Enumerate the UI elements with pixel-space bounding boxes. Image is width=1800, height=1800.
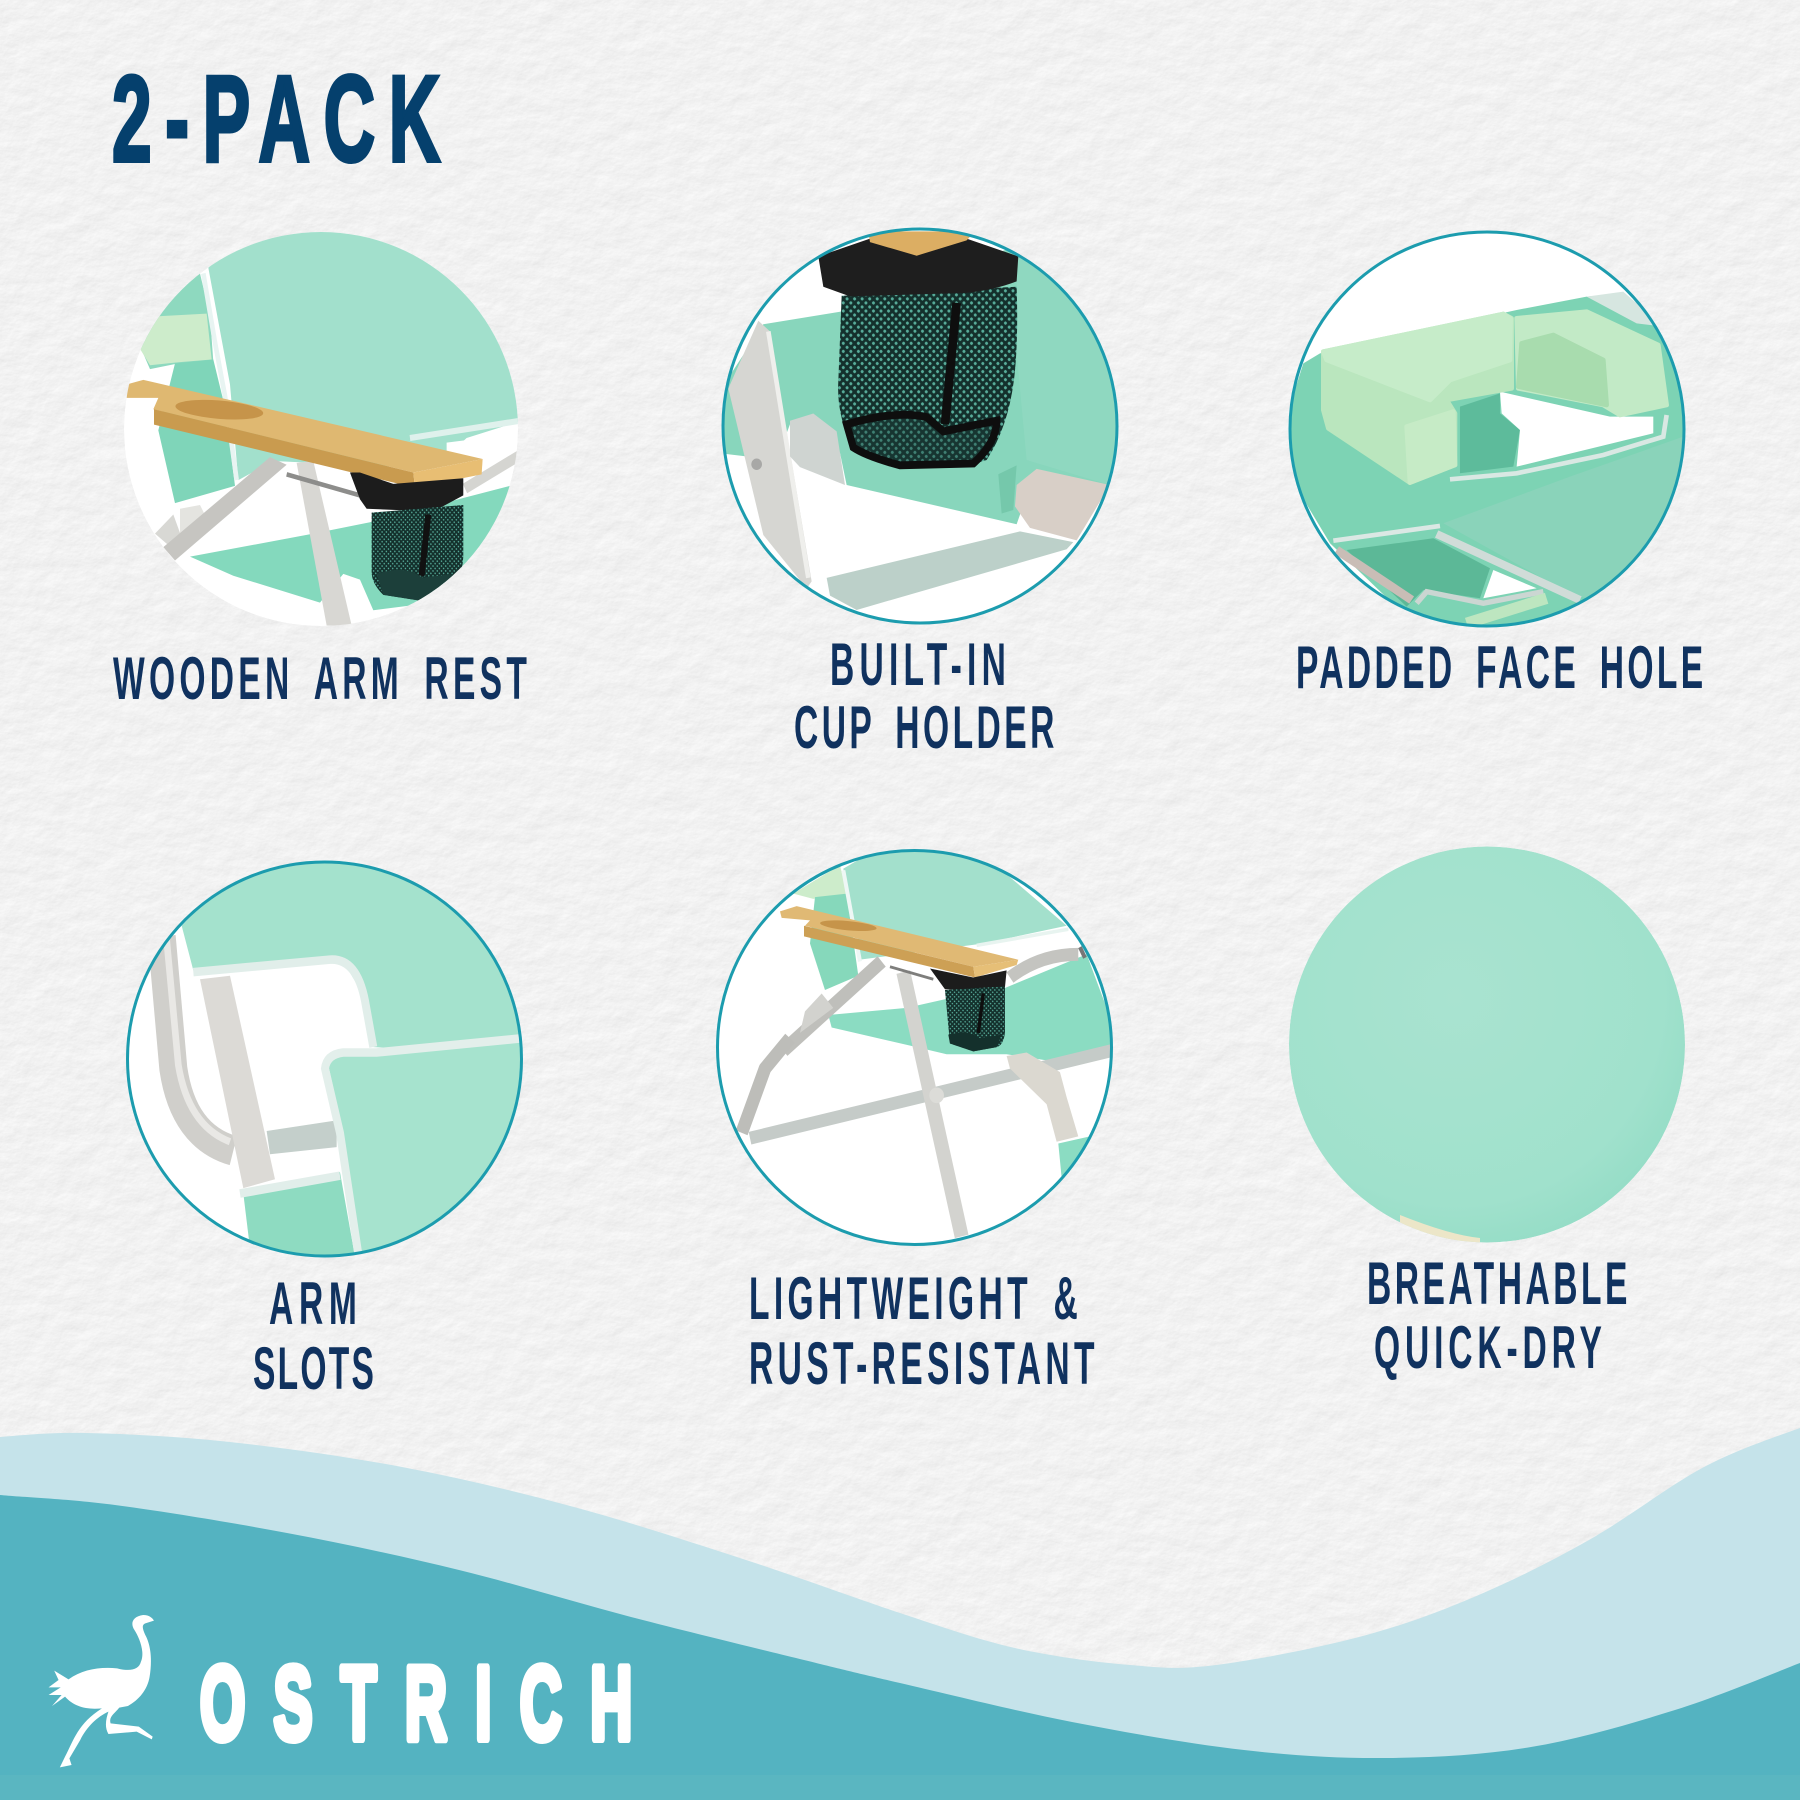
label: arm slots: ARM bbox=[269, 1271, 357, 1338]
ring: padded face hole bbox=[1290, 232, 1684, 626]
label: built-in cup holder bbox=[794, 632, 1054, 762]
icon: running ostrich bbox=[49, 1615, 154, 1767]
photo: padded face hole circle bbox=[1283, 232, 1690, 630]
label: lightweight and rust-resistant bbox=[749, 1266, 1095, 1398]
panel: wooden arm rest bbox=[113, 232, 527, 700]
ring: arm slots bbox=[128, 862, 522, 1256]
label: breathable quick-dry: BREATHABLE bbox=[1367, 1251, 1627, 1318]
label: arm slots bbox=[253, 1271, 374, 1403]
panel: arm slots bbox=[128, 847, 543, 1403]
label: lightweight and rust-resistant: LIGHTWEIGHT & bbox=[749, 1266, 1078, 1333]
logo: Ostrich bbox=[49, 1615, 632, 1767]
photo: arm rest circle bbox=[124, 232, 518, 626]
label: breathable quick-dry: QUICK-DRY bbox=[1374, 1315, 1602, 1382]
label: built-in cup holder: CUP HOLDER bbox=[794, 695, 1054, 762]
photo: fabric swatch circle bbox=[1289, 846, 1685, 1250]
label: padded face hole: PADDED FACE HOLE bbox=[1296, 635, 1703, 702]
panel: built-in cup holder bbox=[717, 229, 1133, 762]
wordmark: OSTRICH bbox=[200, 1645, 632, 1761]
photo: cup holder circle bbox=[717, 229, 1133, 623]
photo: arm slots circle bbox=[129, 864, 520, 1254]
panel: breathable quick-dry bbox=[1289, 846, 1685, 1382]
panel: lightweight and rust-resistant bbox=[718, 840, 1120, 1398]
ring: folding frame bbox=[718, 850, 1112, 1244]
wave: dark band bbox=[0, 1495, 1800, 1800]
label: breathable quick-dry bbox=[1367, 1251, 1627, 1382]
panel: padded face hole bbox=[1283, 232, 1703, 702]
title: 2-PACK bbox=[112, 51, 440, 188]
label: built-in cup holder: BUILT-IN bbox=[830, 632, 1006, 699]
photo: folding frame circle bbox=[718, 840, 1120, 1244]
wave: light band bbox=[0, 1428, 1800, 1800]
label: arm slots: SLOTS bbox=[253, 1336, 374, 1403]
label: wooden arm rest: WOODEN ARM REST bbox=[113, 646, 527, 713]
ring: cup holder bbox=[723, 229, 1117, 623]
label: lightweight and rust-resistant: RUST-RESISTANT bbox=[749, 1331, 1095, 1398]
